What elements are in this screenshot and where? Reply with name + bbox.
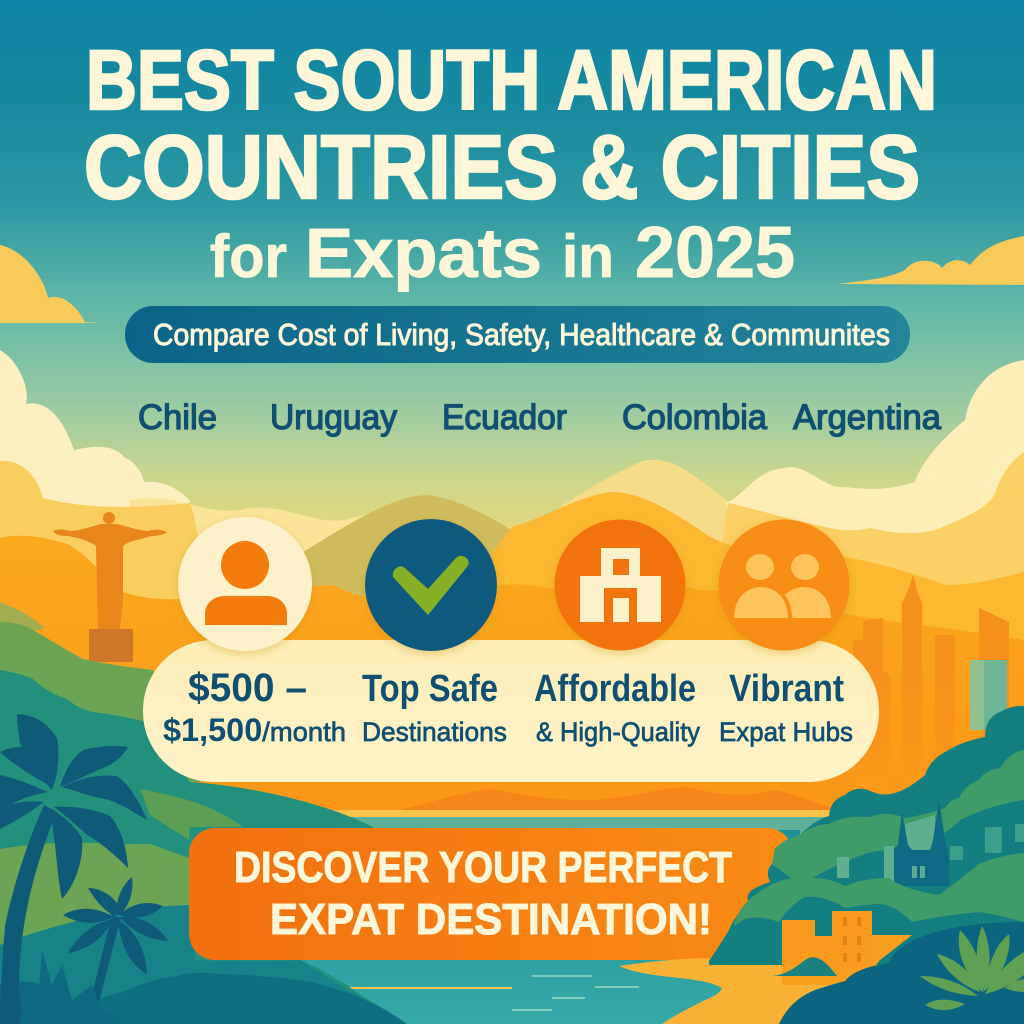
- icon: hospital building: [554, 520, 686, 650]
- icon: person: [178, 517, 312, 651]
- country names: Uruguay: [270, 398, 397, 437]
- sand shore: [619, 958, 880, 1024]
- subtitle pill: [125, 306, 910, 363]
- country names: Ecuador: [442, 398, 567, 437]
- country names: Chile: [138, 398, 217, 437]
- large palm: [0, 714, 147, 1024]
- upper clouds: [0, 236, 1024, 323]
- icon: check mark: [365, 519, 497, 651]
- icon: community people: [718, 520, 850, 650]
- country names: Argentina: [793, 398, 942, 437]
- small palm: [63, 877, 168, 1024]
- country names: Colombia: [622, 398, 768, 437]
- info panel: [143, 640, 879, 782]
- statue: Christ the Redeemer: [53, 512, 167, 662]
- call to action button: [189, 828, 793, 960]
- stat: communities: [719, 668, 853, 747]
- title: COUNTRIES & CITIES: [84, 118, 920, 218]
- palm trees: [0, 714, 168, 1024]
- title: 2025: [635, 213, 795, 293]
- far hills on the lake: [400, 787, 840, 810]
- title: [84, 33, 937, 293]
- stat: healthcare: [534, 668, 700, 747]
- stat: cost of living: [163, 666, 346, 748]
- stat: communities: Vibrant: [729, 668, 844, 710]
- low fronds: [20, 950, 120, 1024]
- orange mountains: [0, 492, 1024, 830]
- stat: safety: Top Safe: [362, 668, 498, 710]
- right foliage: [709, 706, 1024, 965]
- stat: healthcare: Affordable: [534, 668, 696, 710]
- call to action button: EXPAT DESTINATION!: [270, 895, 712, 944]
- country names: [138, 398, 942, 437]
- city skyline: [853, 575, 1009, 800]
- dark foreground foliage: [779, 922, 1024, 1024]
- call to action button: DISCOVER YOUR PERFECT: [234, 843, 732, 892]
- stat: cost of living: $500 –: [188, 666, 307, 710]
- title: for: [210, 223, 287, 290]
- foreground buildings: [772, 911, 912, 985]
- stat: safety: Destinations: [362, 717, 507, 747]
- stat: communities: Expat Hubs: [719, 717, 853, 747]
- agave plant: [920, 926, 1024, 1010]
- left green hills: [0, 602, 407, 1024]
- title: in: [562, 223, 614, 290]
- water: [240, 810, 940, 1024]
- stat: safety: [362, 668, 507, 747]
- stat: healthcare: & High-Quality: [536, 717, 700, 747]
- title: Expats: [305, 214, 542, 292]
- stat: cost of living: $1,500/month: [163, 712, 346, 748]
- subtitle pill: Compare Cost of Living, Safety, Healthcare & Communites: [153, 317, 890, 352]
- pale clouds and far mountains: [0, 350, 1024, 620]
